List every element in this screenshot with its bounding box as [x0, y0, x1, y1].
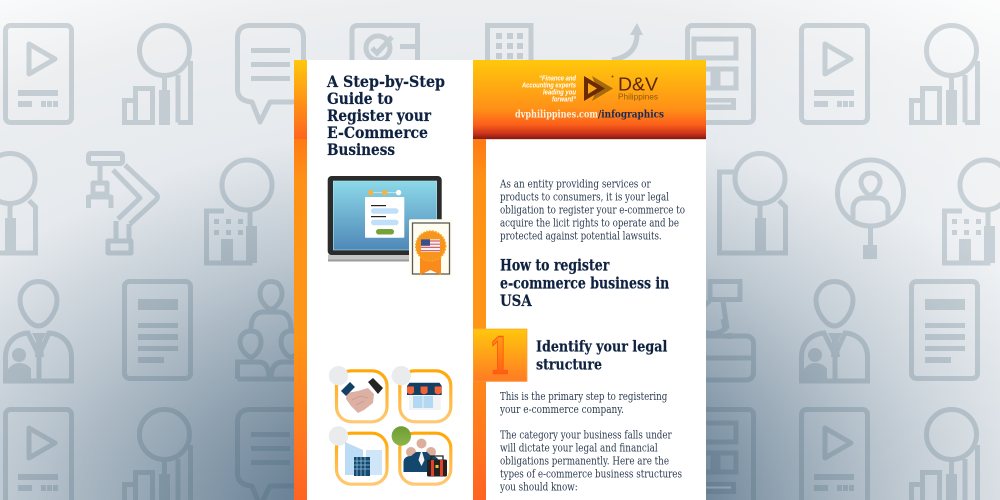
tagline: leading you: [543, 90, 577, 96]
step 1 heading: [536, 338, 668, 373]
icon: team with briefcase LLC: [392, 426, 451, 484]
step 1 body text: obligations permanently. Here are the: [500, 455, 669, 468]
panel: header banner: [473, 60, 706, 140]
step 1 body text: This is the primary step to registering: [500, 390, 667, 403]
heading: title: Register your: [327, 106, 432, 125]
panel: left column: [307, 60, 473, 500]
infographic page: [294, 60, 706, 500]
tagline: “Finance and: [539, 76, 577, 82]
logo wordmark: D&V: [618, 75, 658, 95]
step 1 body text: The category your business falls under: [500, 429, 672, 442]
step 1 body text: types of e-commerce business structures: [500, 468, 682, 481]
intro paragraph: As an entity providing services or: [499, 178, 651, 191]
intro paragraph: protected against potential lawsuits.: [500, 230, 662, 243]
intro paragraph: products to consumers, it is your legal: [500, 191, 669, 204]
heading: title: [326, 72, 445, 159]
logo wordmark: [618, 75, 658, 101]
icon: USA certificate: [409, 219, 452, 277]
panel: right column: [486, 139, 706, 500]
heading: how to register: [500, 256, 669, 310]
website url: dvphilippines.com: [515, 110, 598, 120]
icon: building corporation: [329, 426, 387, 484]
step 1 body text: your e-commerce company.: [499, 403, 624, 416]
heading: how to register: e-commerce business in: [500, 273, 669, 292]
website url: [515, 110, 664, 120]
heading: title: E-Commerce: [327, 123, 428, 142]
intro paragraph: obligation to register your e-commerce to: [500, 204, 685, 217]
icon: handshake partnership: [329, 366, 387, 422]
website url: /infographics: [598, 110, 664, 120]
step 1 body text: you should know:: [499, 481, 578, 494]
heading: title: Business: [327, 140, 395, 159]
step 1 number badge: [473, 326, 527, 386]
icon group: business structures: [329, 366, 451, 484]
tagline: forward”: [552, 96, 576, 104]
left orange strip bottom: [294, 139, 307, 500]
intro paragraph: [499, 178, 685, 243]
logo wordmark: Philippines: [618, 92, 658, 101]
tagline: Accounting experts: [521, 82, 576, 90]
icon: store sole proprietorship: [392, 366, 451, 422]
step 1 number badge: 1: [489, 326, 510, 386]
heading: title: A Step-by-Step: [326, 72, 445, 91]
tagline: [521, 76, 577, 104]
step 1 heading: structure: [536, 355, 602, 373]
step 1 heading: Identify your legal: [536, 338, 668, 356]
heading: how to register: USA: [500, 291, 533, 310]
intro paragraph: acquire the licit rights to operate and be: [500, 217, 679, 230]
step 1 body text: will dictate your legal and financial: [500, 442, 658, 455]
icon: D&V logo mark: [584, 76, 614, 101]
middle orange strip: [473, 139, 486, 500]
left orange strip top: [294, 60, 307, 139]
heading: title: Guide to: [327, 89, 393, 108]
icon: laptop with form: [328, 176, 442, 262]
step 1 body text: [499, 390, 682, 494]
heading: how to register: How to register: [500, 256, 610, 274]
